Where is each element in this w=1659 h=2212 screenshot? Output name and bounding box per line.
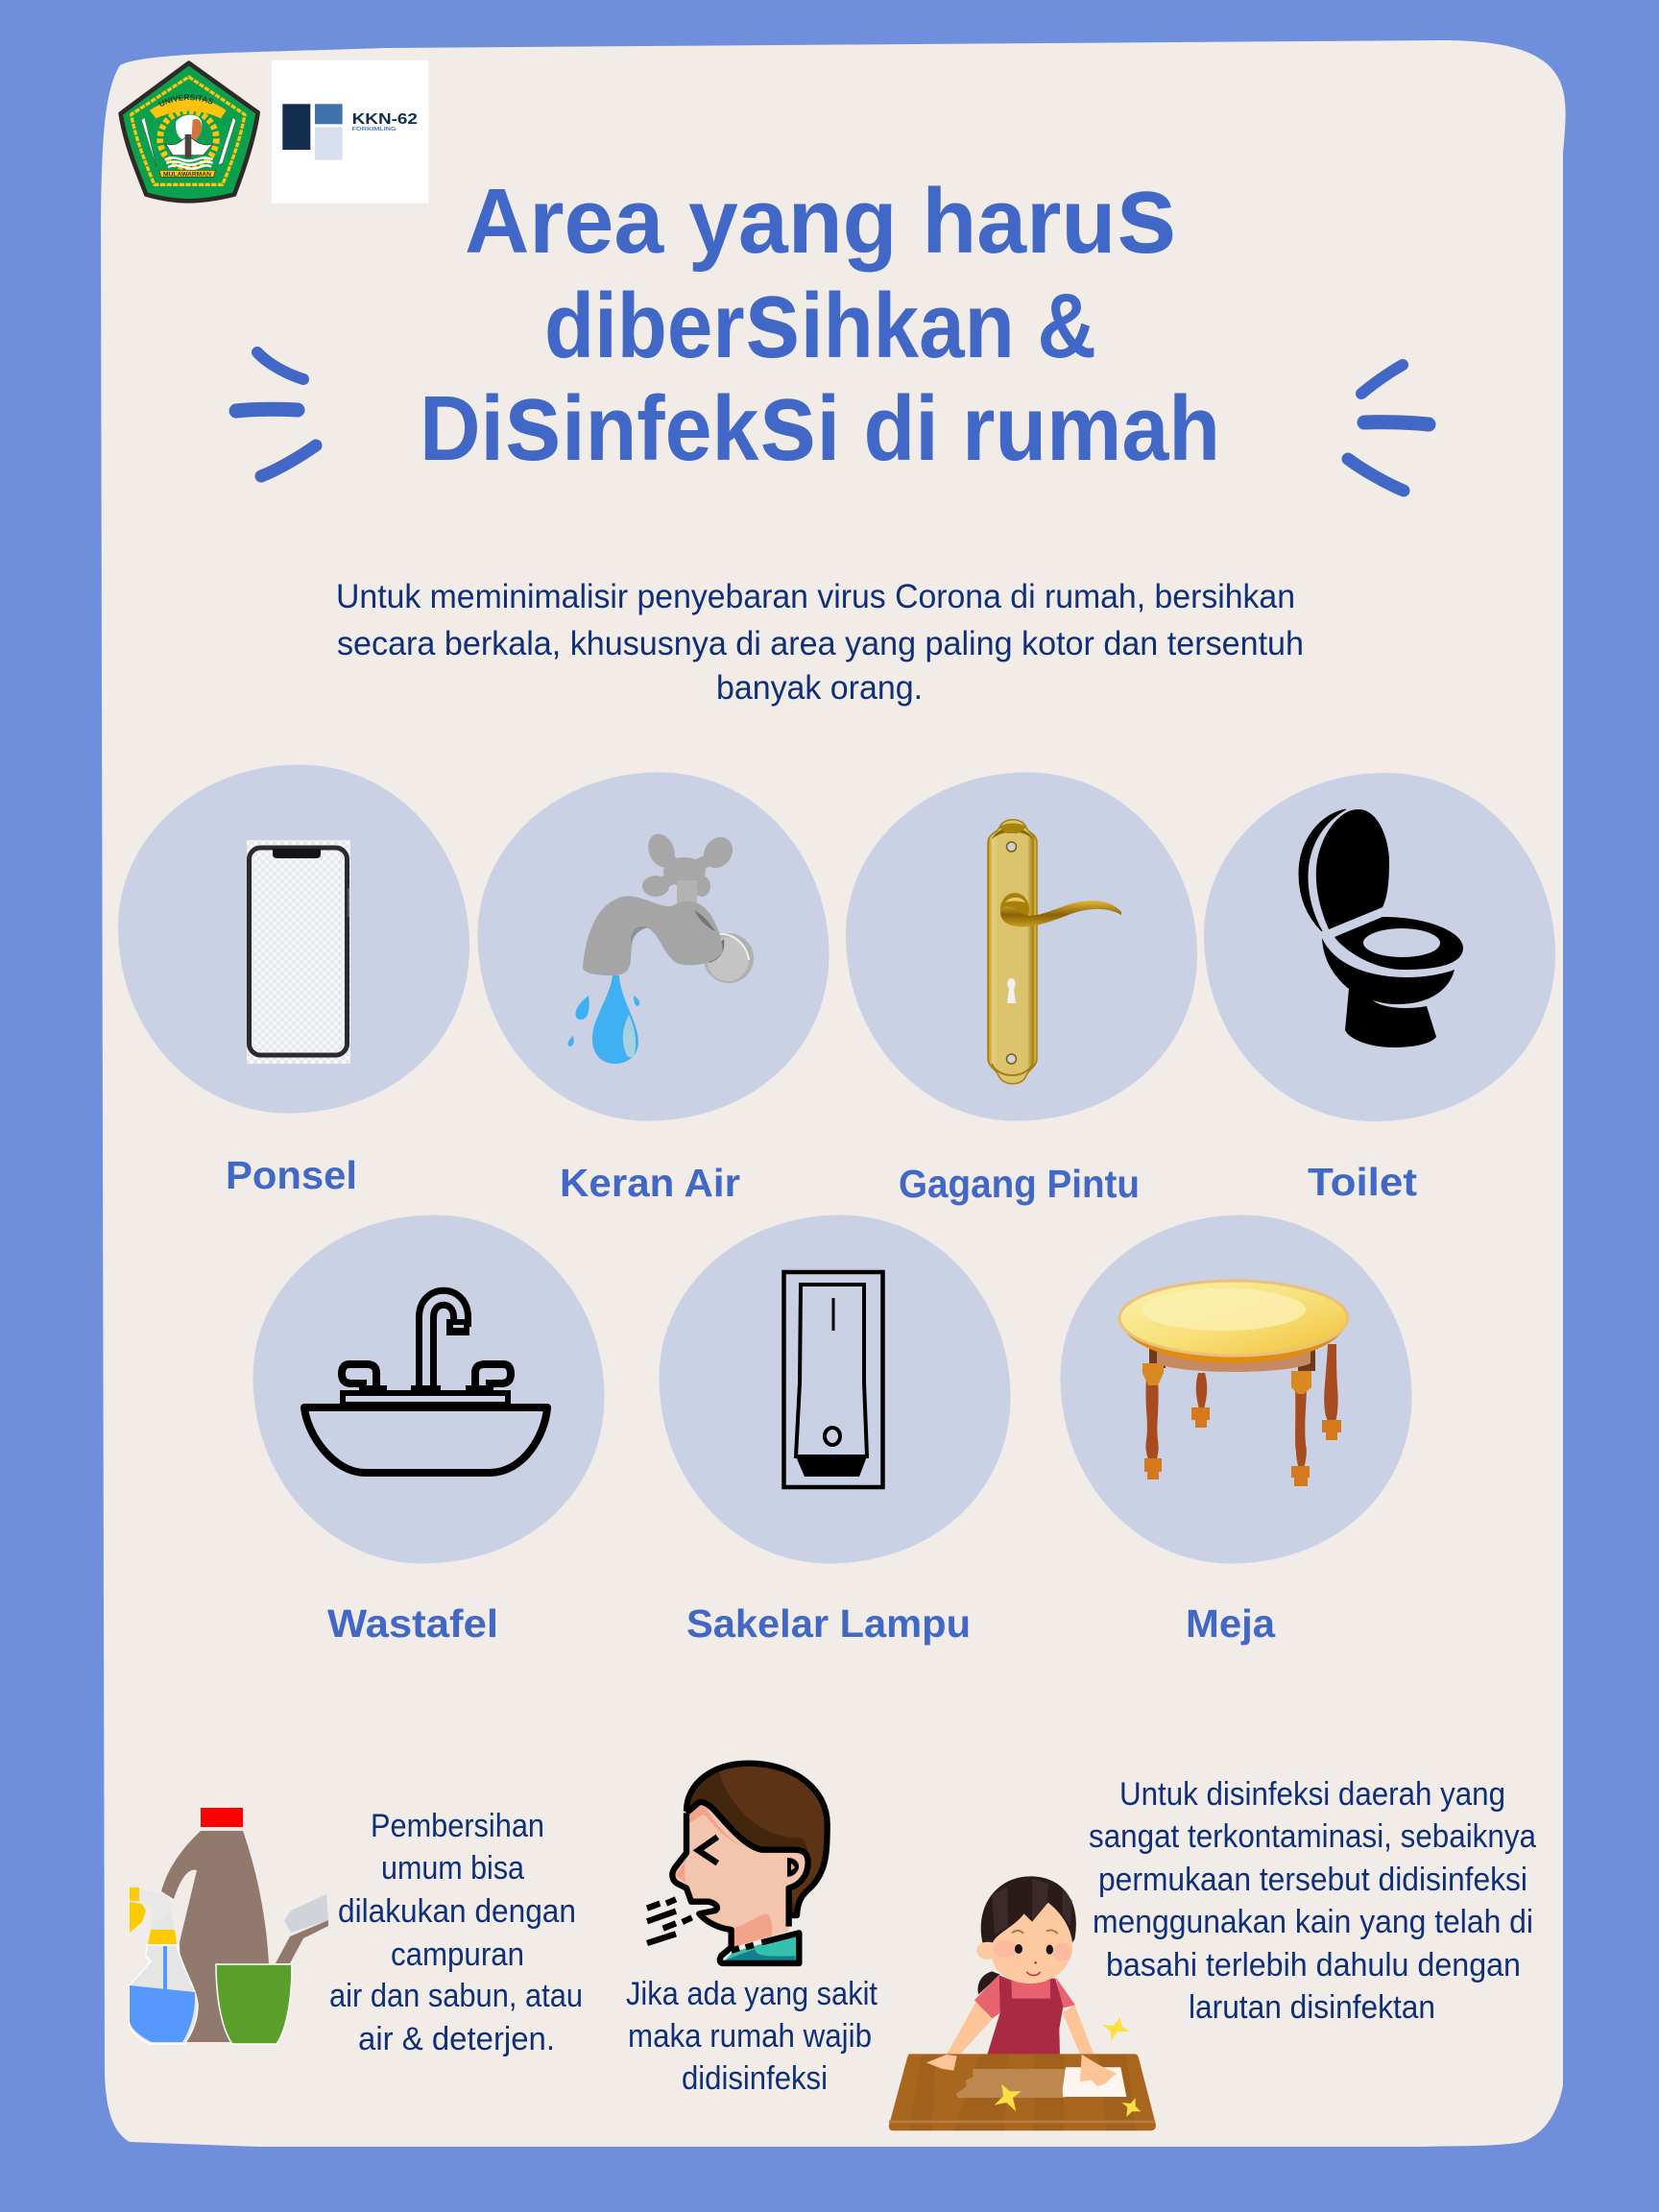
text: jika ada yang sakit: didisinfeksi bbox=[682, 2060, 828, 2097]
logo: KKN-62 Forkimling bbox=[272, 60, 428, 204]
text: disinfeksi daerah: sangat terkontaminasi, sebaiknya bbox=[1089, 1818, 1536, 1855]
circle: keran air bbox=[478, 772, 830, 1121]
title: Area yang harus bbox=[465, 151, 1177, 277]
icon: faucet bbox=[568, 830, 754, 1064]
intro text: banyak orang. bbox=[716, 669, 923, 707]
circle: meja bbox=[1060, 1215, 1411, 1563]
label: gagang pintu: Gagang Pintu bbox=[899, 1162, 1140, 1206]
icon: light switch bbox=[783, 1272, 883, 1487]
text: jika ada yang sakit: Jika ada yang sakit bbox=[626, 1976, 878, 2012]
text: disinfeksi daerah: Untuk disinfeksi daerah yang bbox=[1119, 1776, 1505, 1813]
text: disinfeksi daerah: menggunakan kain yang telah di bbox=[1093, 1904, 1533, 1940]
icon: door handle bbox=[988, 820, 1121, 1084]
label: toilet: Toilet bbox=[1308, 1160, 1417, 1204]
intro text: Untuk meminimalisir penyebaran virus Corona di rumah, bersihkan bbox=[336, 578, 1295, 615]
decoration: left burst strokes bbox=[236, 352, 316, 476]
logo: university emblem: MULAWARMAN bbox=[163, 172, 211, 178]
title: dibersihkan & bbox=[544, 255, 1096, 382]
text: pembersihan umum: air & deterjen. bbox=[358, 2021, 555, 2057]
text: pembersihan umum: Pembersihan bbox=[371, 1808, 544, 1844]
title: Disinfeksi di rumah bbox=[420, 358, 1220, 485]
text: pembersihan umum: umum bisa bbox=[381, 1850, 524, 1887]
text: jika ada yang sakit: maka rumah wajib bbox=[628, 2018, 872, 2055]
text: pembersihan umum: campuran bbox=[391, 1936, 524, 1973]
circle: sakelar lampu bbox=[659, 1215, 1010, 1563]
text: pembersihan umum: dilakukan dengan bbox=[338, 1893, 576, 1930]
text: disinfeksi daerah: larutan disinfektan bbox=[1189, 1989, 1435, 2026]
text: pembersihan umum bbox=[329, 1808, 583, 2057]
text: jika ada yang sakit bbox=[626, 1976, 878, 2097]
circle: wastafel bbox=[253, 1215, 605, 1563]
text: pembersihan umum: air dan sabun, atau bbox=[329, 1978, 583, 2014]
logo: university emblem: UNIVERSITAS bbox=[158, 94, 213, 107]
logo: university emblem bbox=[118, 60, 260, 204]
text: disinfeksi daerah: basahi terlebih dahulu dengan bbox=[1106, 1947, 1521, 1984]
label: keran air: Keran Air bbox=[560, 1161, 740, 1205]
icon: sink bbox=[304, 1298, 547, 1473]
logo: KKN-62 Forkimling: KKN-62 bbox=[352, 111, 418, 128]
icon: coughing person bbox=[647, 1764, 828, 1963]
icon: cleaning supplies bbox=[130, 1808, 328, 2044]
intro text bbox=[336, 578, 1304, 707]
circle: ponsel bbox=[118, 764, 469, 1114]
decoration: right burst strokes bbox=[1348, 365, 1429, 491]
icon: phone bbox=[247, 840, 350, 1064]
circle: gagang pintu bbox=[846, 772, 1197, 1121]
label: sakelar lampu: Sakelar Lampu bbox=[686, 1601, 971, 1646]
label: wastafel: Wastafel bbox=[327, 1601, 498, 1646]
circle: toilet bbox=[1204, 773, 1555, 1121]
text: disinfeksi daerah: permukaan tersebut didisinfeksi bbox=[1098, 1862, 1527, 1898]
label: meja: Meja bbox=[1186, 1601, 1276, 1646]
logo: KKN-62 Forkimling: FORKIMLING bbox=[352, 127, 397, 132]
label: ponsel: Ponsel bbox=[226, 1153, 357, 1197]
text: disinfeksi daerah bbox=[1089, 1776, 1536, 2026]
icon: toilet bbox=[1299, 809, 1463, 1047]
illustration: woman wiping table bbox=[889, 1876, 1156, 2130]
title bbox=[420, 151, 1220, 485]
icon: round table bbox=[1119, 1281, 1348, 1486]
intro text: secara berkala, khususnya di area yang paling kotor dan tersentuh bbox=[337, 625, 1304, 662]
